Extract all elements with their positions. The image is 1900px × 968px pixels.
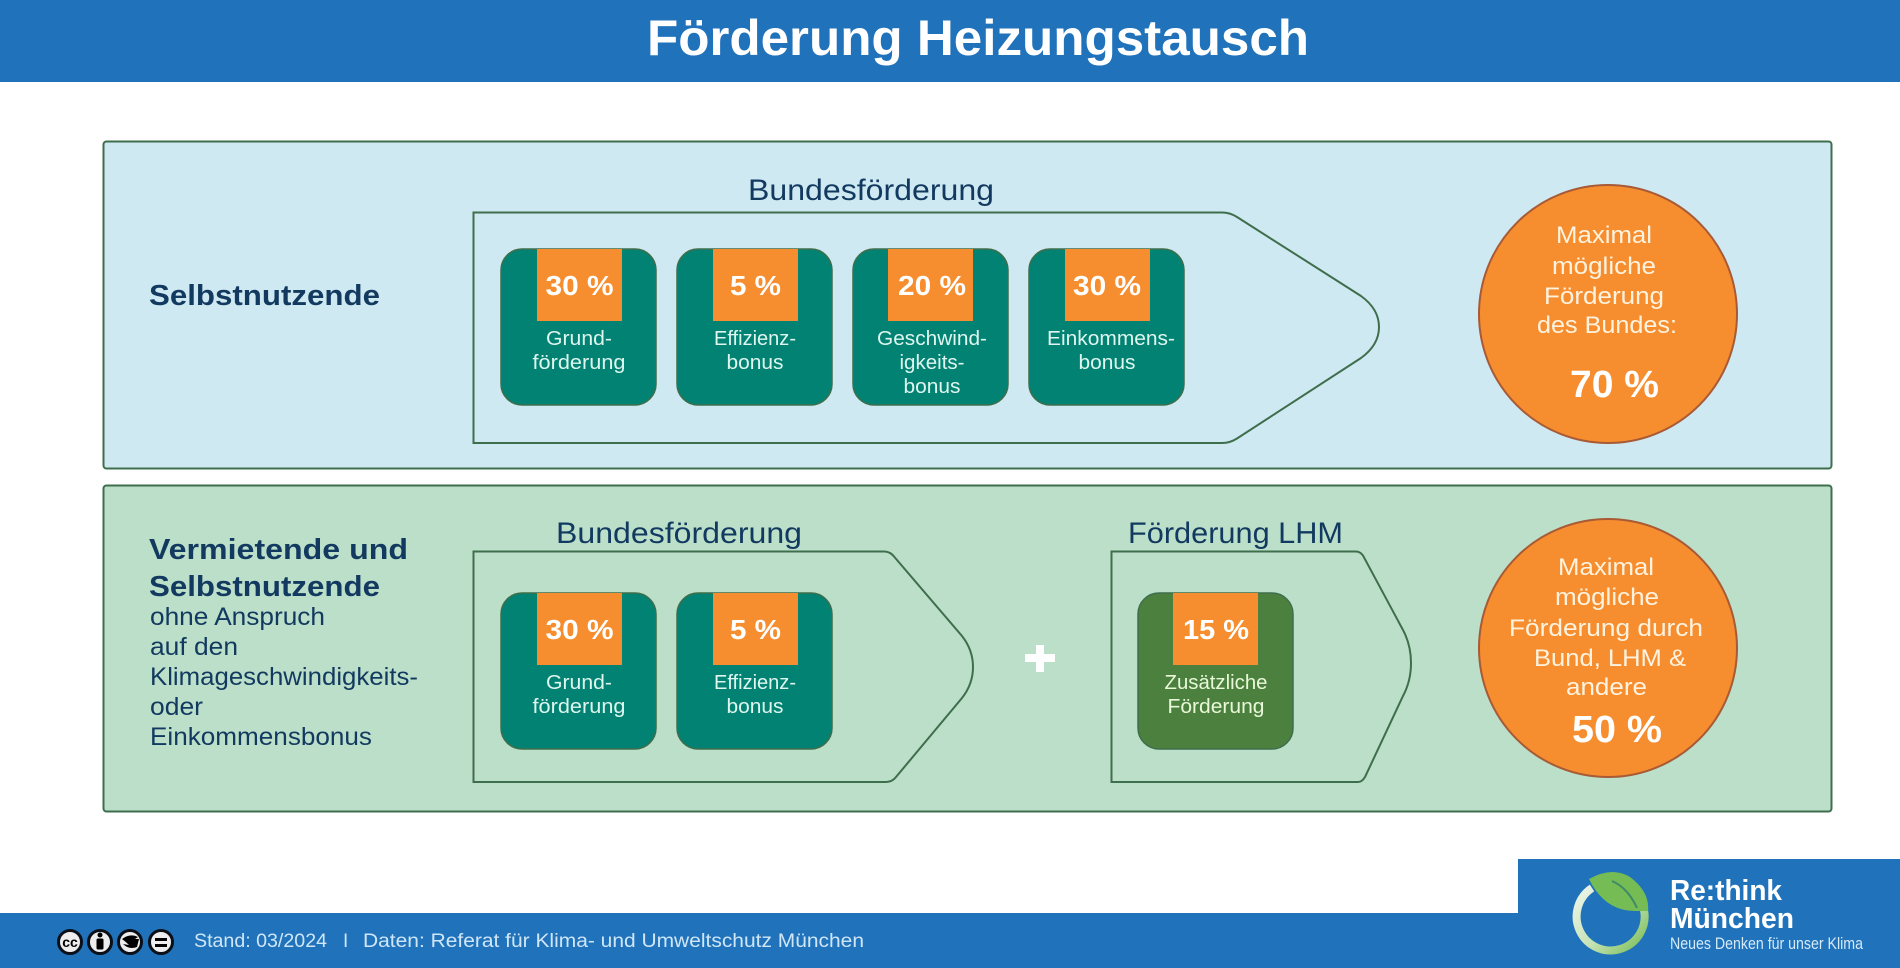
card: Grundförderung: 30 % (546, 270, 614, 301)
card: Grundförderung: förderung (532, 696, 626, 718)
text block: Vermietende und Selbstnutzende: Vermietende und (149, 534, 408, 566)
card: Effizienzbonus: Effizienz- (714, 672, 796, 694)
tagline: Neues Denken für unser Klima (1670, 935, 1864, 953)
card: Geschwindigkeitsbonus: 20 % (898, 270, 966, 301)
card: Effizienzbonus (677, 593, 832, 749)
card: Einkommensbonus: bonus (1078, 352, 1136, 374)
card: Effizienzbonus (677, 249, 832, 405)
icon: plus (1025, 645, 1055, 672)
card: Geschwindigkeitsbonus: Geschwind- (877, 328, 987, 350)
card: Grundförderung: 30 % (546, 614, 614, 645)
card: Einkommensbonus: Einkommens- (1047, 328, 1175, 350)
callout: maximum federal funding (1479, 185, 1737, 443)
card: Zusätzliche Förderung: Förderung (1168, 696, 1264, 718)
callout: maximum combined funding (1479, 519, 1737, 777)
panel: Vermietende und Selbstnutzende (104, 486, 1832, 812)
card: Geschwindigkeitsbonus: bonus (904, 376, 960, 398)
card: Grundförderung (501, 593, 656, 749)
card: Geschwindigkeitsbonus (853, 249, 1008, 405)
footer text (194, 931, 864, 952)
heading: Bundesförderung: Bundesförderung (748, 174, 994, 207)
card: Grundförderung: förderung (532, 352, 626, 374)
logo: Re:think München (1577, 872, 1864, 953)
logo: Re:think München: München (1670, 903, 1794, 935)
text block: Vermietende und Selbstnutzende: Selbstnutzende (149, 571, 380, 603)
card: Geschwindigkeitsbonus: igkeits- (900, 352, 964, 374)
text block: Vermietende und Selbstnutzende: auf den (150, 633, 238, 661)
callout: maximum federal funding: des Bundes: (1537, 312, 1677, 339)
title: Förderung Heizungstausch (647, 10, 1309, 66)
card: Zusätzliche Förderung: Zusätzliche (1164, 672, 1268, 694)
footer bar (0, 859, 1900, 968)
callout: maximum combined funding: Bund, LHM & (1534, 645, 1686, 672)
callout: maximum federal funding: mögliche (1552, 253, 1656, 280)
footer text: I (343, 931, 348, 952)
heading: Selbstnutzende: Selbstnutzende (149, 280, 380, 312)
arrow: Förderung LHM (1112, 552, 1411, 782)
text block: Vermietende und Selbstnutzende (149, 534, 418, 751)
icon: ring and leaf (1577, 872, 1648, 950)
text block: Vermietende und Selbstnutzende: oder (150, 693, 203, 721)
card: Effizienzbonus: bonus (726, 352, 784, 374)
callout: maximum combined funding: Maximal (1558, 554, 1654, 581)
icons: Creative Commons licence (58, 930, 172, 954)
arrow: Bundesförderung (474, 552, 973, 782)
card: Effizienzbonus: bonus (726, 696, 784, 718)
card: Effizienzbonus: Effizienz- (714, 328, 796, 350)
text block: Vermietende und Selbstnutzende: Klimageschwindigkeits- (150, 663, 418, 691)
title banner (0, 0, 1900, 82)
card: Effizienzbonus: 5 % (730, 614, 781, 645)
wordmark: Re:think (1670, 875, 1783, 907)
callout: maximum combined funding: andere (1566, 674, 1647, 701)
callout: maximum federal funding: Förderung (1544, 283, 1664, 310)
callout: maximum federal funding: 70 % (1570, 364, 1659, 406)
callout: maximum combined funding: Förderung durch (1509, 615, 1703, 642)
heading: Förderung LHM: Förderung LHM (1128, 517, 1343, 550)
card: Zusätzliche Förderung (1138, 593, 1293, 749)
card: Effizienzbonus: 5 % (730, 270, 781, 301)
panel: Selbstnutzende (104, 142, 1832, 468)
callout: maximum combined funding: 50 % (1572, 709, 1662, 751)
heading: Bundesförderung: Bundesförderung (556, 517, 802, 550)
arrow: Bundesförderung (474, 212, 1379, 443)
text block: Vermietende und Selbstnutzende: ohne Anspruch (150, 603, 325, 631)
callout: maximum combined funding: mögliche (1555, 584, 1659, 611)
card: Zusätzliche Förderung: 15 % (1183, 614, 1249, 645)
card: Einkommensbonus (1029, 249, 1184, 405)
callout: maximum federal funding: Maximal (1556, 222, 1652, 249)
footer text: Stand: 03/2024 (194, 931, 327, 952)
icons: Creative Commons licence: cc (62, 934, 78, 950)
card: Einkommensbonus: 30 % (1073, 270, 1141, 301)
card: Grundförderung: Grund- (546, 328, 612, 350)
text block: Vermietende und Selbstnutzende: Einkommensbonus (150, 723, 372, 751)
footer text: Daten: Referat für Klima- und Umweltschutz München (363, 931, 864, 952)
card: Grundförderung (501, 249, 656, 405)
card: Grundförderung: Grund- (546, 672, 612, 694)
